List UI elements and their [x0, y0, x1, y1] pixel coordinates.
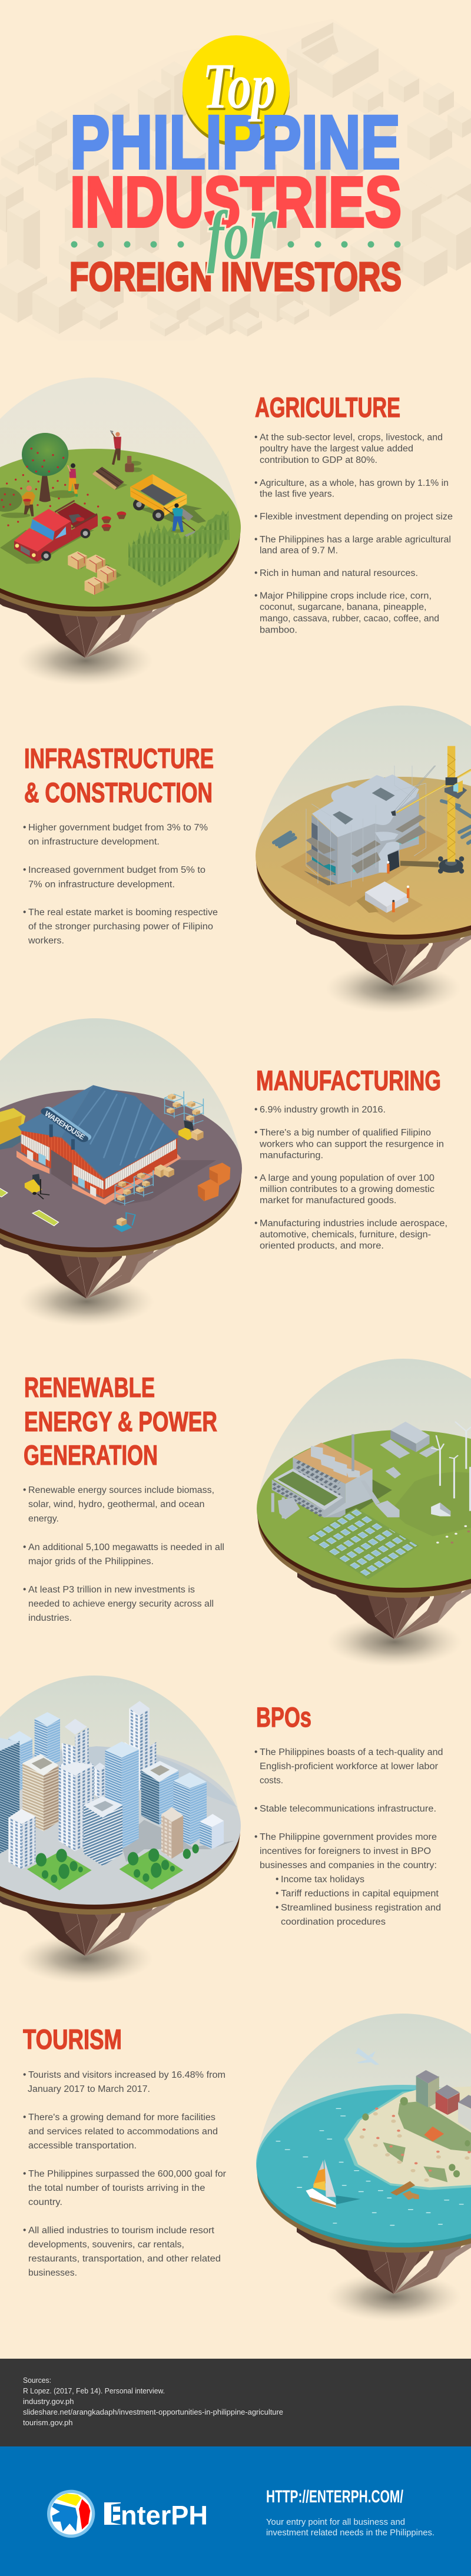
tagline: investment related needs in the Philippines. [266, 2528, 434, 2538]
workers [387, 861, 409, 912]
delivery truck [0, 1108, 25, 1150]
shipping containers [198, 1163, 230, 1201]
heading: tourism: TOURISM [23, 2024, 122, 2055]
bullet list: BPOs: Stable telecommunications infrastructure. [260, 1804, 436, 1814]
bullet list: BPOs: Income tax holidays [281, 1875, 364, 1885]
bullet list: manufacturing: Manufacturing industries include aerospace, [260, 1219, 447, 1229]
farmer picking fruit [68, 463, 79, 496]
website URL: HTTP://ENTERPH.COM/ [266, 2487, 403, 2507]
bullet list: manufacturing: • [254, 1218, 257, 1229]
small tower [94, 1763, 105, 1799]
panel: BPOs [0, 1676, 443, 1984]
red pickup truck [0, 501, 98, 564]
bullet list: infrastructure: workers. [28, 936, 64, 946]
sources text: Sources: [23, 2376, 51, 2385]
bullet list: agriculture: • [254, 535, 257, 544]
beach [344, 2087, 471, 2190]
bullet list: infrastructure: Higher government budget from 3% to 7% [28, 823, 208, 833]
pipes [274, 801, 471, 846]
farmer with basket [22, 485, 35, 516]
EnterPH wordmark: nterPH [121, 2501, 208, 2530]
fruit baskets [102, 511, 126, 531]
bullet list: manufacturing: oriented products, and more. [260, 1241, 384, 1251]
panel: renewable energy and power generation [23, 1359, 471, 1667]
farmhouse [431, 1502, 450, 1517]
panel: agriculture [0, 378, 453, 686]
tower [84, 1796, 122, 1866]
bullet list: BPOs: • [276, 1874, 278, 1885]
bullet list: infrastructure: on infrastructure development. [28, 837, 160, 847]
tower [35, 1712, 60, 1767]
heading: renewable energy: ENERGY & POWER [24, 1406, 217, 1437]
bullet list: renewable energy: energy. [28, 1514, 59, 1524]
water sparkles [276, 2108, 463, 2226]
bullet list: manufacturing: 6.9% industry growth in 2016. [260, 1105, 386, 1115]
bullet list: tourism: • [23, 2112, 26, 2123]
yellow circle badge [183, 35, 290, 146]
bullet list: tourism: accessible transportation. [28, 2141, 137, 2151]
hand cart [112, 1213, 135, 1232]
bullet list: tourism: There's a growing demand for more facilities [28, 2113, 215, 2123]
bullet list: renewable energy: industries. [28, 1613, 72, 1623]
bullet list: manufacturing: million contributes to a growing domestic [260, 1184, 434, 1194]
concrete building [304, 766, 426, 888]
farmer with rake [164, 504, 196, 537]
title script: Top: Top [204, 52, 277, 124]
tagline [266, 2518, 434, 2538]
cardboard boxes [68, 551, 122, 595]
bullet list: manufacturing: • [254, 1105, 257, 1114]
bullet list: manufacturing: automotive, chemicals, furniture, design- [260, 1230, 431, 1240]
bullet list: infrastructure: The real estate market is booming respective [28, 908, 218, 918]
storage racks [115, 1091, 203, 1206]
bullet list: tourism: developments, souvenirs, car rentals, [28, 2240, 184, 2250]
grass field [128, 511, 230, 587]
bullet list: tourism: the total number of tourists arriving in the [28, 2183, 205, 2193]
bullet list: agriculture: The Philippines has a large arable agricultural [260, 535, 451, 545]
bullet list: BPOs: The Philippine government provides more [260, 1832, 437, 1842]
bullet list: agriculture: Rich in human and natural resources. [260, 568, 418, 578]
bullet list: BPOs: coordination procedures [281, 1917, 386, 1927]
bullet list: BPOs: • [254, 1803, 257, 1814]
heading: BPOs: BPOs [256, 1701, 311, 1733]
bullet list: renewable energy: Renewable energy sources include biomass, [28, 1485, 214, 1495]
yellow trailer [130, 474, 206, 523]
bullet list: tourism: • [23, 2168, 26, 2179]
warehouse building [16, 1085, 181, 1205]
bullet list: tourism: All allied industries to tourism include resort [28, 2226, 215, 2236]
bullet list: agriculture: land area of 9.7 M. [260, 545, 338, 556]
sources band [0, 2359, 471, 2446]
bullet list: infrastructure [23, 822, 218, 946]
bullet list: agriculture: • [254, 478, 257, 488]
bullet list: renewable energy: needed to achieve energy security across all [28, 1599, 214, 1609]
tree stump [125, 456, 142, 472]
bullet list: renewable energy: • [23, 1584, 26, 1595]
concrete slabs [356, 882, 408, 913]
sources text: slideshare.net/arangkadaph/investment-opportunities-in-philippine-agriculture [23, 2408, 283, 2416]
bullet list: manufacturing [254, 1105, 447, 1251]
bullet list: infrastructure: of the stronger purchasing power of Filipino [28, 922, 213, 932]
power plant building [272, 1434, 400, 1518]
bullet list: BPOs: The Philippines boasts of a tech-quality and [260, 1747, 443, 1757]
bullet list: tourism: January 2017 to March 2017. [28, 2084, 150, 2094]
bullet list: renewable energy: At least P3 trillion in new investments is [28, 1585, 195, 1595]
island illustration: warehouse [0, 1018, 242, 1326]
tower [105, 1741, 139, 1849]
bullet list: BPOs: • [276, 1902, 278, 1913]
bullet list: tourism: restaurants, transportation, and other related [28, 2254, 221, 2264]
bullet list: agriculture: bamboo. [260, 625, 297, 635]
title script: Top: Top [203, 50, 276, 122]
bullet list: manufacturing: • [254, 1173, 257, 1183]
dotted divider [71, 241, 400, 247]
bullet list: BPOs: • [276, 1888, 278, 1899]
livestock [437, 1526, 466, 1542]
bullet list: infrastructure: • [23, 907, 26, 918]
bullet list: agriculture: • [254, 568, 257, 578]
tent [424, 2127, 444, 2141]
island illustration: construction site [256, 706, 471, 1013]
bullet list: renewable energy [23, 1485, 224, 1623]
island illustration: city towers [0, 1676, 241, 1984]
warehouse sign [48, 1110, 87, 1137]
small refinery [271, 1493, 300, 1519]
bullet list: renewable energy: solar, wind, hydro, geothermal, and ocean [28, 1499, 205, 1509]
bullet list: manufacturing: manufacturing. [260, 1151, 323, 1160]
bullet list: tourism: The Philippines surpassed the 600,000 goal for [28, 2169, 226, 2179]
bullet list: infrastructure: • [23, 865, 26, 875]
bullet list: tourism: and services related to accommodations and [28, 2127, 218, 2137]
bullet list: tourism: businesses. [28, 2268, 77, 2278]
bullet list: BPOs: costs. [260, 1776, 283, 1786]
panel: infrastructure and construction [23, 706, 471, 1013]
road markings [0, 1187, 58, 1226]
bullet list: BPOs: businesses and companies in the country: [260, 1860, 437, 1870]
heading: infrastructure and construction [24, 743, 214, 808]
tower [8, 1731, 32, 1790]
log pile [92, 467, 128, 490]
parks with trees [27, 1844, 199, 1890]
bullet list: agriculture [254, 432, 453, 635]
bullet list: manufacturing: A large and young population of over 100 [260, 1173, 434, 1183]
stacked boxes [155, 1164, 174, 1177]
tower [0, 1738, 19, 1853]
tan tower [161, 1807, 183, 1859]
panel: tourism [23, 2014, 471, 2322]
bullet list: agriculture: coconut, sugarcane, banana, pineapple, [260, 602, 426, 612]
dock and rowboats [390, 2181, 419, 2200]
island illustration: beach resort [256, 2014, 471, 2322]
bullet list: agriculture: Flexible investment depending on project size [260, 512, 453, 522]
wind turbines [431, 1422, 471, 1511]
heading: renewable energy: RENEWABLE [24, 1372, 155, 1403]
tower [58, 1719, 94, 1852]
tower [22, 1754, 58, 1832]
bullet list: agriculture: • [254, 591, 257, 601]
bullet list: BPOs: English-proficient workforce at lower labor [260, 1762, 438, 1772]
bullet list: manufacturing: market for manufactured goods. [260, 1196, 397, 1206]
bullet list: BPOs: Tariff reductions in capital equipment [281, 1889, 439, 1899]
beach umbrellas [364, 2108, 469, 2171]
bullet list: BPOs: • [254, 1832, 257, 1842]
low tower [200, 1814, 224, 1849]
icon: EnterPH logo mark [47, 2490, 95, 2538]
title block [69, 35, 402, 299]
bullet list: BPOs: • [254, 1747, 257, 1757]
bullet list: agriculture: Agriculture, as a whole, has grown by 1.1% in [260, 478, 449, 488]
bullet list: BPOs: Streamlined business registration and [281, 1903, 441, 1913]
bullet list: tourism: country. [28, 2197, 62, 2207]
bullet list: manufacturing: There's a big number of qualified Filipino [260, 1128, 431, 1138]
heading: renewable energy: GENERATION [24, 1439, 158, 1471]
heading: infrastructure and construction: & CONSTRUCTION [24, 777, 213, 808]
tower [141, 1761, 179, 1825]
tower crane [391, 746, 471, 873]
bullet list: BPOs [254, 1747, 443, 1927]
bullet list: manufacturing: workers who can support the resurgence in [259, 1139, 444, 1150]
title script: for: for [207, 170, 278, 281]
bullet list: agriculture: • [254, 432, 257, 442]
sources text: R Lopez. (2017, Feb 14). Personal interview. [23, 2386, 165, 2395]
island illustration: power plant, solar and wind [257, 1359, 471, 1667]
bullet list: tourism: • [23, 2070, 26, 2080]
hotel buildings [416, 2070, 471, 2131]
bullet list: infrastructure: 7% on infrastructure development. [28, 879, 175, 889]
sources text [23, 2376, 283, 2427]
bullet list: renewable energy: • [23, 1485, 26, 1495]
sailboat [306, 2159, 360, 2208]
warehouse sign label: WAREHOUSE [43, 1110, 86, 1141]
bullet list: renewable energy: • [23, 1542, 26, 1552]
tower [173, 1773, 207, 1845]
bullet list: manufacturing: • [254, 1127, 257, 1138]
bullet list: renewable energy: major grids of the Philippines. [28, 1557, 154, 1567]
sources text: industry.gov.ph [23, 2397, 74, 2406]
tagline: Your entry point for all business and [266, 2518, 405, 2527]
panel: manufacturing [0, 1018, 447, 1326]
bullet list: agriculture: the last five years. [260, 489, 334, 499]
bullet list: tourism: Tourists and visitors increased by 16.48% from [28, 2070, 225, 2080]
bullet list: renewable energy: An additional 5,100 megawatts is needed in all [28, 1542, 224, 1552]
heading: renewable energy [24, 1372, 217, 1471]
bullet list: BPOs: incentives for foreigners to invest in BPO [260, 1846, 431, 1856]
bullet list: agriculture: Major Philippine crops include rice, corn, [260, 591, 432, 601]
warehouse sign posts [51, 1124, 73, 1150]
background isometric city pattern [0, 19, 471, 340]
bullet list: agriculture: • [254, 511, 257, 522]
tree [22, 433, 78, 502]
bullet list: tourism [23, 2070, 226, 2278]
heading: agriculture: AGRICULTURE [255, 392, 400, 423]
bullet list: agriculture: At the sub-sector level, crops, livestock, and [260, 432, 443, 443]
bullet list: tourism: • [23, 2225, 26, 2236]
bullet list: agriculture: mango, cassava, rubber, cacao, coffee, and [260, 614, 439, 624]
island illustration: farm [0, 378, 241, 686]
bullet list: agriculture: poultry have the largest value added [260, 444, 413, 454]
footer band [0, 2446, 471, 2576]
palm trees [362, 2097, 470, 2177]
sources text: tourism.gov.ph [23, 2418, 73, 2427]
heading: infrastructure and construction: INFRASTRUCTURE [24, 743, 214, 774]
utility buildings [380, 1422, 439, 1478]
woodcutter [110, 431, 121, 465]
airplane [354, 2048, 379, 2065]
bullet list: infrastructure: Increased government budget from 5% to [28, 865, 205, 875]
tower [125, 1701, 156, 1790]
bullet list: infrastructure: • [23, 822, 26, 833]
forklifts [25, 1120, 204, 1199]
bullet list: agriculture: contribution to GDP at 80%. [260, 455, 377, 465]
white tower [8, 1809, 35, 1869]
solar panel array [306, 1508, 419, 1580]
